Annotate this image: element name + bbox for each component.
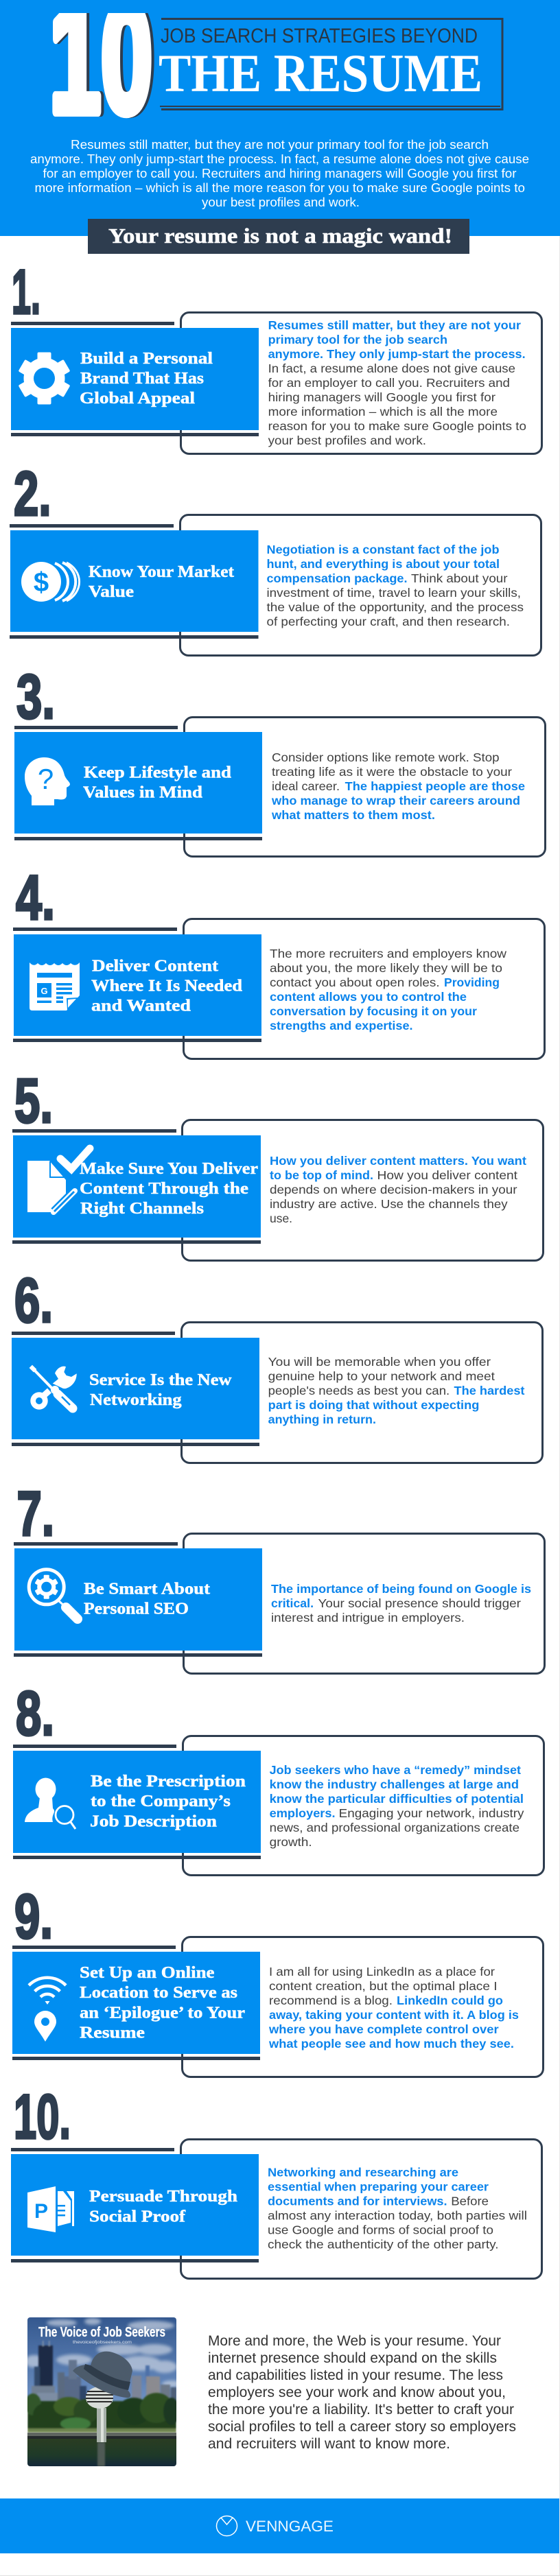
body text: to be top of mind. [270,1168,373,1182]
icon: coins [21,562,80,602]
cover url: thevoiceofjobseekers.com [73,2340,132,2345]
panel: strategy 2 [10,459,541,656]
icon: coins: $ [34,567,49,598]
body text: Your social presence should trigger [318,1596,521,1610]
top rule [14,1542,178,1546]
heading [80,1963,245,2042]
text card [184,919,545,1059]
body text: How you deliver content matters. You want [270,1154,526,1168]
body text: hunt, and everything is about your total [266,557,500,571]
heading [80,349,213,407]
heading: Persuade Through [89,2187,237,2206]
text card [183,1120,544,1261]
body text [270,1763,524,1849]
body text: what matters to them most. [271,808,435,822]
heading: Brand That Has [80,369,204,388]
body text: LinkedIn could go [397,1994,503,2007]
title box [11,328,259,430]
body text: anymore. They only jump-start the process. [268,347,526,361]
intro paragraph: for an employer to call you. Recruiters and hiring managers will Google you first for [43,167,517,180]
body text: part is doing that without expecting [268,1398,479,1412]
heading [89,1371,232,1409]
heading: Location to Serve as [80,1983,237,2002]
step number: 4. [16,863,55,933]
title box [12,1338,259,1439]
body text: You will be memorable when you offer [268,1355,491,1369]
panel: strategy 3 [14,662,545,856]
bottom rule [11,2259,259,2262]
panel: strategy 1 [11,257,542,454]
icon: gear [19,353,70,405]
heading: Job Description [90,1812,217,1831]
step number: 10. [14,2082,71,2152]
closing paragraph: employers see your work and know about you, [208,2384,506,2400]
closing paragraph: internet presence should expand on the skills [208,2350,497,2366]
body text: The more recruiters and employers know [270,947,506,960]
body text [270,1154,526,1225]
top rule [11,322,174,325]
bottom rule [13,1039,261,1042]
heading [84,1579,211,1618]
body text: Job seekers who have a “remedy” mindset [270,1763,521,1777]
intro paragraph: more information – which is all the more reason for you to make sure Google points to [34,181,525,195]
icon: presentation file: P [34,2200,48,2223]
body text: more information – which is all the more [268,405,498,418]
heading: Keep Lifestyle and [84,763,231,782]
top rule [13,927,177,931]
footer [0,2498,559,2553]
body text [268,2166,527,2252]
heading [89,2187,237,2225]
title box [14,1548,262,1651]
heading: Values in Mind [83,783,202,801]
body text: interest and intrigue in employers. [271,1611,465,1624]
body text: I am all for using LinkedIn as a place for [269,1965,495,1978]
title box [10,530,258,632]
intro paragraph: Resumes still matter, but they are not your primary tool for the job search [71,138,489,152]
title box [13,1135,261,1238]
bottom rule [13,1856,261,1859]
body text: employers. [270,1806,335,1820]
bottom rule [10,635,258,639]
text card [184,718,545,856]
panel: strategy 8 [13,1679,544,1876]
top rule [13,1745,176,1748]
text card [180,515,541,656]
heading: an ‘Epilogue’ to Your [80,2003,245,2022]
footer wordmark: VENNGAGE [246,2518,334,2535]
heading: Service Is the New [89,1371,232,1389]
body text: The happiest people are those [345,779,525,793]
heading: Know Your Market [89,563,235,581]
panel: strategy 4 [13,863,545,1059]
body text: Networking and researching are [268,2166,458,2179]
step number: 6. [14,1266,53,1336]
body text: treating life as it were the obstacle to your [272,765,512,779]
step number: 9. [14,1882,53,1952]
intro paragraph: anymore. They only jump-start the process. In fact, a resume alone does not give cause [30,152,529,166]
body text: critical. [271,1596,314,1610]
body text: growth. [270,1835,312,1849]
closing paragraph: More and more, the Web is your resume. Your [208,2332,501,2349]
title box [13,1751,261,1853]
panel: strategy 7 [14,1479,545,1674]
intro paragraph [30,138,529,209]
body text: use Google and forms of social proof to [268,2223,493,2237]
heading: Value [89,582,134,601]
top rule [12,1332,175,1335]
body text: check the authenticity of the other party. [268,2238,499,2252]
heading: Deliver Content [92,956,219,976]
body text: content creation, but the optimal place I [269,1979,497,1993]
heading: Make Sure You Deliver [80,1159,258,1178]
body text: strengths and expertise. [270,1019,413,1032]
body text: genuine help to your network and meet [268,1369,495,1383]
step number: 3. [16,662,55,732]
icon: venngage logo [217,2516,237,2536]
body text: away, taking your content with it. A blog is [269,2008,519,2022]
heading: to the Company’s [91,1792,231,1810]
body text: Think about your [411,571,508,585]
heading [83,763,231,801]
icon: person with magnifier [25,1778,75,1829]
body text: know the particular difficulties of potential [270,1792,524,1806]
title line 2: THE RESUME [159,43,482,103]
body text: who manage to wrap their careers around [271,794,520,807]
body text: content allows you to control the [270,990,467,1004]
icon: magnifier with gear [29,1570,78,1619]
body text: Resumes still matter, but they are not your [268,318,521,332]
icon: head with question mark: ? [38,763,54,795]
body text: In fact, a resume alone does not give cause [268,362,515,375]
panel: strategy 9 [12,1882,544,2077]
body text: The importance of being found on Google is [271,1582,531,1596]
body text: Providing [444,976,500,989]
body text: the value of the opportunity, and the process [266,600,524,614]
microphone [86,2387,113,2442]
heading: Social Proof [89,2208,186,2225]
body text [270,947,506,1032]
body text: for an employer to call you. Recruiters and [268,376,510,390]
heading: Personal SEO [84,1600,189,1618]
body text [271,751,525,822]
top rule [10,524,174,528]
body text: about you, the more likely they will be to [270,961,502,975]
title box [14,732,262,834]
body text: know the industry challenges at large and [270,1777,519,1791]
heading: Content Through the [80,1179,248,1198]
heading: Global Appeal [80,389,195,407]
heading: Set Up an Online [80,1963,215,1982]
body text: of perfecting your craft, and then research. [266,615,510,628]
panel: header [0,0,560,254]
body text: hiring managers will Google you first for [268,390,495,404]
title box [14,934,261,1036]
banner: Your resume is not a magic wand! [108,224,452,248]
text card [181,1323,542,1463]
heading: Where It Is Needed [91,977,242,995]
bottom rule [11,433,259,436]
panel: strategy 10 [11,2082,542,2279]
step number: 2. [14,459,51,529]
top rule [14,726,178,729]
text card [184,1534,545,1674]
top rule [12,1946,176,1949]
big number 10 [52,13,154,118]
step number: 1. [12,257,40,327]
icon: newspaper [30,962,80,1011]
body text: industry are active. Use the channels they [270,1197,508,1211]
icon: wrench and screwdriver [30,1366,77,1410]
body text: recommend is a blog. [269,1994,393,2007]
top rule [12,1129,176,1133]
bottom rule [12,2057,260,2060]
text card [181,313,542,454]
closing paragraph: social profiles to tell a career story so employers [208,2418,516,2435]
text card [183,1736,544,1876]
body text: what people see and how much they see. [268,2037,514,2051]
banner [88,219,469,254]
icon: head with question mark [25,757,70,805]
body text: where you have complete control over [268,2022,499,2036]
heading: and Wanted [91,997,191,1015]
cover title: The Voice of Job Seekers [38,2325,165,2340]
bottom rule [14,837,262,840]
title frame [160,18,504,110]
step number: 7. [16,1479,54,1549]
intro paragraph: your best profiles and work. [202,196,360,209]
title line 1: JOB SEARCH STRATEGIES BEYOND [161,25,478,47]
body text [268,1965,519,2051]
body text: your best profiles and work. [268,434,426,447]
panel: strategy 5 [12,1066,544,1261]
body text: conversation by focusing it on your [270,1004,477,1018]
body text: The hardest [454,1384,525,1397]
heading: Networking [90,1391,182,1409]
body text: documents and for interviews. [268,2195,447,2208]
title box [12,1952,260,2054]
heading: Resume [80,2024,145,2042]
body text [266,543,524,628]
closing paragraph: and capabilities listed in your resume. The less [208,2367,503,2383]
hat [73,2352,132,2398]
body text: news, and professional organizations create [270,1821,520,1834]
heading: Be the Prescription [91,1772,246,1791]
top rule [11,2148,174,2151]
body text: How you deliver content [377,1168,517,1182]
body text: Negotiation is a constant fact of the job [266,543,500,556]
body text: investment of time, travel to learn your skills, [266,586,521,600]
step number: 5. [14,1066,53,1136]
body text: depends on where decision-makers in your [270,1183,517,1196]
closing paragraph: and recruiters will want to know more. [208,2435,450,2452]
body text: contact you about open roles. [270,976,440,989]
text card [183,1937,544,2077]
body text: Engaging your network, industry [339,1806,524,1820]
heading: Build a Personal [80,349,213,368]
heading: Be Smart About [84,1579,211,1598]
body text: essential when preparing your career [268,2180,489,2194]
body text: Consider options like remote work. Stop [272,751,500,764]
body text: Before [451,2195,489,2208]
heading [80,1159,258,1218]
heading [90,1772,246,1831]
closing paragraph: the more you're a liability. It's better to craft your [208,2401,514,2418]
closing paragraph [208,2332,516,2452]
body text [271,1582,531,1624]
body text: compensation package. [266,571,408,585]
text card [181,2139,542,2279]
panel: strategy 6 [12,1266,542,1463]
bottom rule [12,1240,261,1244]
title box [11,2154,259,2256]
bottom rule [12,1443,259,1446]
body text [268,318,526,447]
image: The Voice of Job Seekers cover [25,2317,181,2466]
bottom rule [14,1653,262,1657]
body text [268,1355,525,1426]
icon: newspaper: G [40,986,48,996]
icon: wifi and map pin [29,1978,66,2042]
body text: anything in return. [268,1413,376,1426]
heading: Right Channels [80,1199,204,1218]
heading [89,563,235,601]
body text: reason for you to make sure Google points to [268,419,526,433]
body text: almost any interaction today, both parties will [268,2209,527,2223]
body text: primary tool for the job search [268,333,447,346]
body text: use. [270,1212,292,1225]
icon: presentation file [27,2186,74,2232]
body text: people's needs as best you can. [268,1384,450,1397]
heading [91,956,242,1015]
body text: ideal career. [272,779,340,793]
step number: 8. [16,1679,54,1749]
icon: document, check and pencil [27,1148,90,1212]
